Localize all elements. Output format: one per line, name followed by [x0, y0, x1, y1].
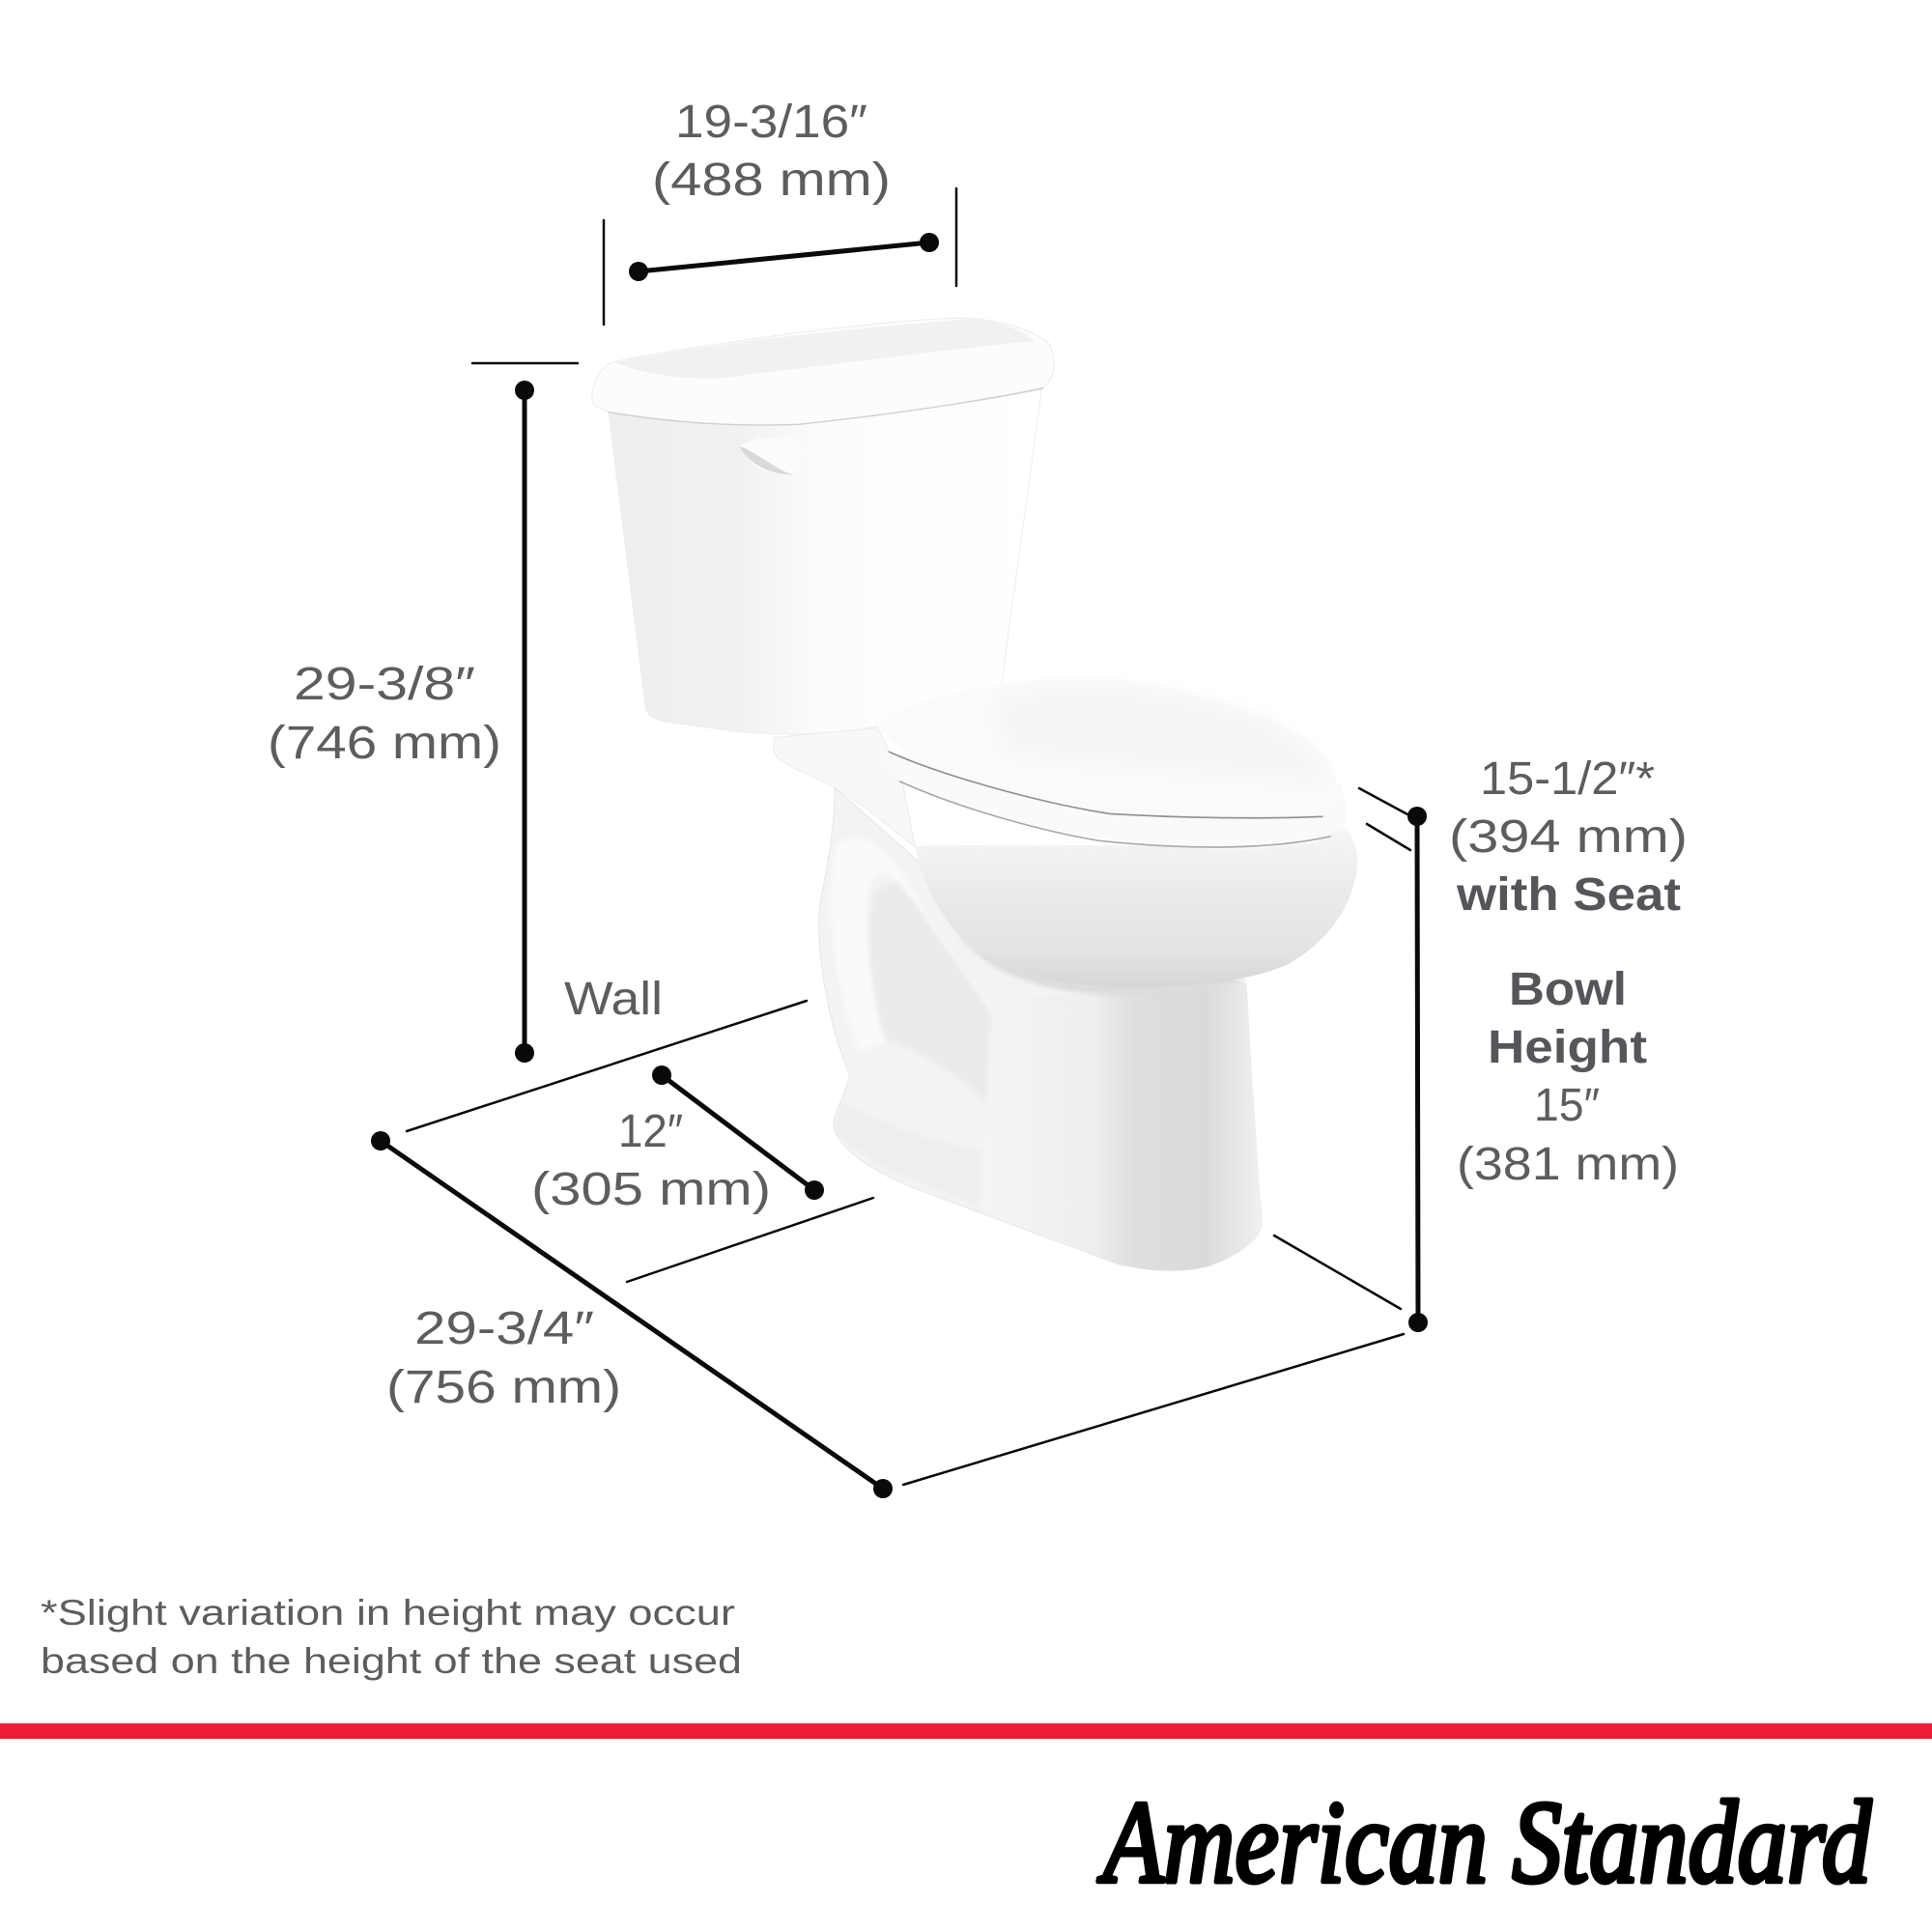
base front face	[982, 984, 1262, 1270]
seat ring lower edge	[899, 781, 1331, 847]
rough-in label: (305 mm)	[531, 1164, 771, 1215]
width label	[652, 97, 891, 206]
lid top plane	[615, 319, 1034, 379]
bowl collar	[958, 933, 1248, 996]
wall reference line	[407, 1001, 807, 1131]
bowl height label: Height	[1488, 1022, 1647, 1073]
base channel shading	[834, 1102, 980, 1205]
footnote: *Slight variation in height may occur	[41, 1593, 735, 1633]
depth label	[386, 1303, 621, 1413]
footnote	[41, 1593, 742, 1681]
toilet bowl and base	[773, 676, 1358, 1270]
height with seat label	[1449, 753, 1688, 921]
trapway tube highlight	[831, 838, 990, 1051]
base pedestal	[819, 787, 1262, 1270]
neck	[773, 727, 915, 846]
lid shadow line	[608, 388, 1043, 425]
height with seat label: with Seat	[1456, 869, 1681, 921]
toilet tank	[592, 318, 1054, 734]
red divider band	[0, 1723, 1932, 1739]
trapway recess	[869, 882, 991, 1102]
seat ring	[881, 752, 1346, 849]
bowl height label: 15″	[1534, 1080, 1600, 1131]
bowl	[915, 827, 1358, 987]
rough-in label: 12″	[618, 1106, 683, 1157]
bowl height label: (381 mm)	[1457, 1139, 1679, 1190]
depth dimension 29-3/4 in	[371, 1131, 1404, 1498]
height label	[268, 659, 501, 769]
lid seam line	[889, 752, 1323, 818]
handle shadow	[739, 446, 792, 475]
height with seat label: (394 mm)	[1449, 811, 1688, 863]
flush handle	[739, 438, 804, 472]
lid top plane	[998, 687, 1331, 783]
rough-in dimension 12 in	[627, 1065, 873, 1282]
seat lid	[877, 676, 1337, 816]
height label: 29-3/8″	[294, 659, 475, 710]
width label: (488 mm)	[652, 155, 891, 206]
tank lid	[592, 318, 1054, 425]
bowl height label: Bowl	[1509, 964, 1627, 1015]
rough-in label	[531, 1106, 771, 1215]
footnote: based on the height of the seat used	[41, 1641, 742, 1681]
depth label: (756 mm)	[386, 1362, 621, 1413]
bowl height dimension	[1274, 788, 1428, 1332]
toilet illustration	[592, 318, 1358, 1270]
width dimension 19-3/16 in	[604, 188, 956, 325]
height dimension 29-3/8 in	[472, 363, 578, 1063]
width label: 19-3/16″	[675, 97, 867, 148]
depth label: 29-3/4″	[414, 1303, 594, 1354]
height label: (746 mm)	[268, 718, 501, 769]
wall label: Wall	[564, 974, 663, 1025]
tank body	[609, 389, 1041, 734]
height with seat label: 15-1/2″*	[1480, 753, 1655, 805]
bowl height label	[1457, 964, 1679, 1190]
